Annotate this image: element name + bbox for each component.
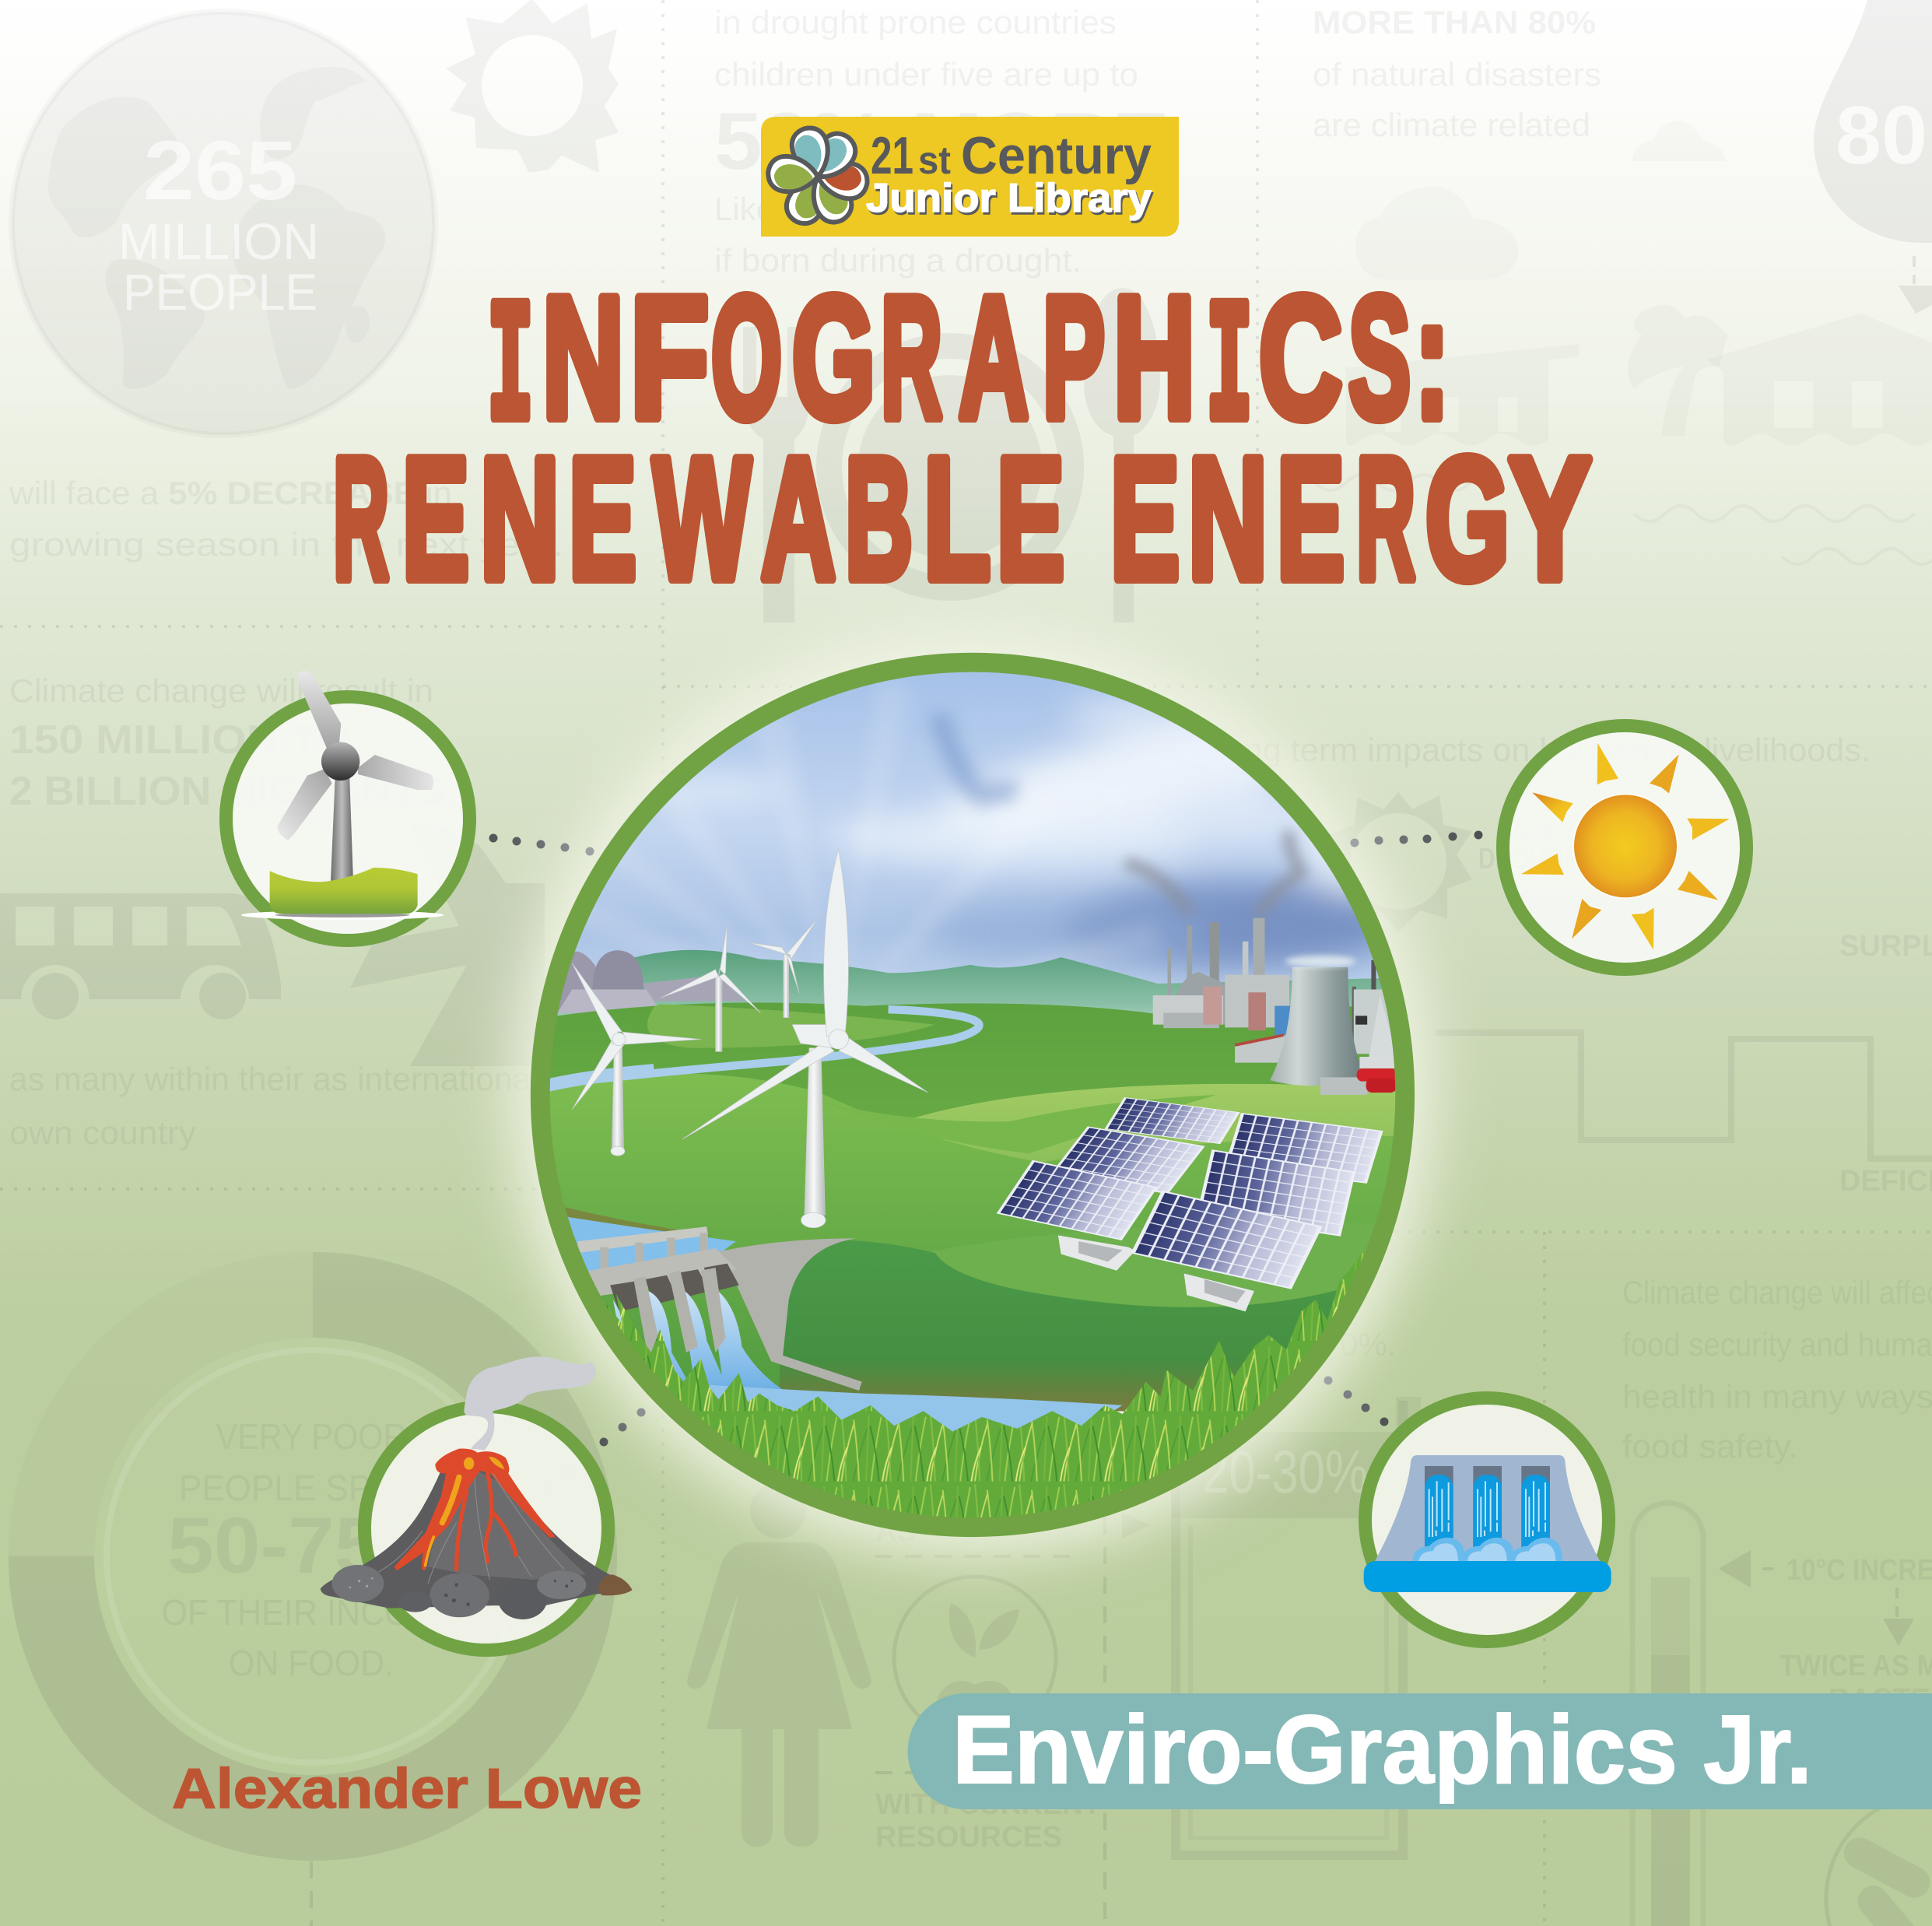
series name: Enviro-Graphics Jr.: [952, 1696, 1812, 1804]
author name: Alexander Lowe: [172, 1758, 642, 1820]
title line 1: P: [1043, 261, 1105, 454]
icon: wind turbine: [226, 671, 470, 940]
solar panels: [998, 1098, 1381, 1311]
faint text blocks: PEOPLE SPEND: [179, 1468, 444, 1508]
faint text blocks: WITH CURRENT: [875, 1788, 1101, 1821]
logo text: Century: [961, 126, 1152, 185]
faint text blocks: as many within their as international: [9, 1061, 538, 1097]
dots: dam to centre: [1324, 1376, 1424, 1453]
faint water drop: [1814, 0, 1932, 243]
dots: wind to centre: [416, 823, 594, 856]
title line 1: O: [711, 261, 782, 454]
faint woman figure: [687, 1482, 871, 1847]
hydroelectric dam: [555, 1215, 862, 1394]
globe text: 265: [143, 123, 297, 217]
dots: sun to centre: [1351, 827, 1555, 847]
title line 1: I: [1206, 273, 1253, 469]
faint text blocks: AS: [875, 1515, 917, 1548]
logo text: 21: [871, 126, 913, 185]
title line 2: N: [1188, 423, 1268, 616]
faint text blocks: own country: [9, 1114, 196, 1151]
green fields: [537, 1002, 1409, 1411]
faint wave lines: [1315, 475, 1932, 564]
faint text blocks: long term impacts on household livelihoods.: [1218, 731, 1871, 768]
nuclear domes: [555, 950, 745, 1013]
faint 20-30% label: 20-30%: [1202, 1437, 1368, 1506]
faint warehouse frame with 20-30%: [1122, 1397, 1421, 1855]
title line 2: Y: [1509, 423, 1591, 616]
title line 2: E: [997, 423, 1064, 616]
globe 265 million people: [12, 12, 435, 435]
faint plant circle: [894, 1577, 1056, 1742]
faint bacteria circle: [1826, 1795, 1932, 1926]
icon: flower: [766, 124, 870, 230]
clouds and sun rays: [549, 679, 1404, 1019]
icon: hydro dam: [1364, 1398, 1611, 1642]
faint text blocks: children under five are up to: [714, 56, 1138, 93]
title line 1: N: [542, 261, 624, 454]
faint plane: [350, 821, 545, 1066]
faint plate and cutlery: [743, 288, 1160, 623]
wind turbines: [572, 849, 928, 1228]
faint text blocks: growing season in the next year.: [9, 526, 563, 563]
publisher logo: [761, 117, 1179, 237]
faint surplus deficit line: [1436, 1033, 1932, 1159]
faint text blocks: health in many ways: [1622, 1378, 1932, 1415]
faint text blocks: 50% MORE: [714, 96, 1169, 187]
faint text blocks: food safety.: [1622, 1428, 1798, 1465]
title line 1: R: [881, 261, 942, 454]
dots: volcano to centre: [543, 1409, 646, 1490]
title line 2: A: [761, 423, 836, 616]
banner shape: [907, 1693, 1932, 1809]
icon: volcano: [321, 1356, 633, 1650]
faint text blocks: 150 MILLION TO: [9, 717, 352, 763]
title line 1: G: [792, 261, 875, 454]
title line 1: F: [630, 261, 709, 454]
faint text blocks: Climate change will result in: [9, 672, 433, 709]
faint text blocks: 0%.: [1340, 1326, 1396, 1363]
faint text blocks: Possible: [1429, 1421, 1523, 1449]
faint text blocks: in drought prone countries: [714, 4, 1117, 40]
title line 1: C: [1259, 261, 1342, 454]
faint text blocks: RESOURCES: [875, 1821, 1062, 1854]
title line 2: W: [653, 423, 751, 616]
title line 2: B: [845, 423, 913, 616]
faint text blocks: are climate related: [1313, 107, 1590, 143]
globe text: PEOPLE: [123, 263, 317, 321]
logo text: Junior Library: [866, 176, 1152, 221]
faint bus: [0, 893, 281, 1019]
faint sun near right: [1323, 792, 1472, 932]
title line 2: G: [1425, 423, 1509, 616]
faint text blocks: will face a 5% DECREASE in: [9, 475, 452, 511]
title line 1: I: [487, 273, 534, 469]
title line 2: N: [480, 423, 559, 616]
icon: sun: [1503, 725, 1746, 970]
faint arrow and clouds: [1355, 121, 1932, 314]
faint text blocks: MORE THAN 80%: [1313, 4, 1596, 40]
title line 2: R: [333, 423, 389, 616]
faint text blocks: 50-75%: [167, 1501, 455, 1590]
sky: [575, 672, 1379, 984]
logo text: st: [918, 139, 951, 182]
faint text blocks: if born during a drought.: [714, 242, 1082, 279]
foreground grass: [604, 1253, 1365, 1517]
faint sun: [446, 0, 619, 173]
title line 1: S: [1348, 261, 1411, 454]
faint donut chart: [51, 1295, 574, 1818]
title line 2: E: [402, 423, 469, 616]
title line 2: E: [1277, 423, 1345, 616]
faint text blocks: of natural disasters: [1313, 56, 1601, 93]
faint text blocks: DROUGHT: [1478, 843, 1595, 875]
main energy scene circle: [537, 661, 1409, 1556]
title line 1: H: [1113, 261, 1195, 454]
title line 1: A: [959, 261, 1029, 454]
globe text: MILLION: [118, 212, 319, 270]
faint text blocks: ON FOOD.: [229, 1643, 394, 1683]
title line 2: E: [569, 423, 636, 616]
faint drop label: 80: [1836, 89, 1927, 181]
river below dam: [709, 1385, 1122, 1432]
faint text blocks: 2 BILLION MIGRANTS.: [9, 769, 457, 814]
main circle ring: [540, 662, 1405, 1528]
faint thermometer: [1632, 1503, 1914, 1926]
faint flooded houses and palm: [1344, 305, 1932, 445]
logo text: [866, 126, 1152, 221]
faint text blocks: OF THEIR INCOME: [162, 1592, 461, 1633]
title line 1: :: [1415, 261, 1450, 454]
soft glow behind main circle: [512, 634, 1433, 1556]
title line 2: L: [924, 423, 991, 616]
connector dots: [416, 823, 1555, 1490]
title line 2: R: [1356, 423, 1415, 616]
distant hills: [557, 949, 1382, 1016]
globe text: [118, 123, 319, 321]
faint text blocks: VERY POOR: [216, 1416, 406, 1457]
faint text blocks: Likely to die: [714, 191, 887, 227]
logo badge: [761, 117, 1179, 237]
series banner: [907, 1693, 1932, 1809]
title: [333, 261, 1591, 616]
factory and cooling tower: [1125, 831, 1397, 1095]
winding river: [537, 1009, 979, 1088]
title line 2: E: [1110, 423, 1180, 616]
